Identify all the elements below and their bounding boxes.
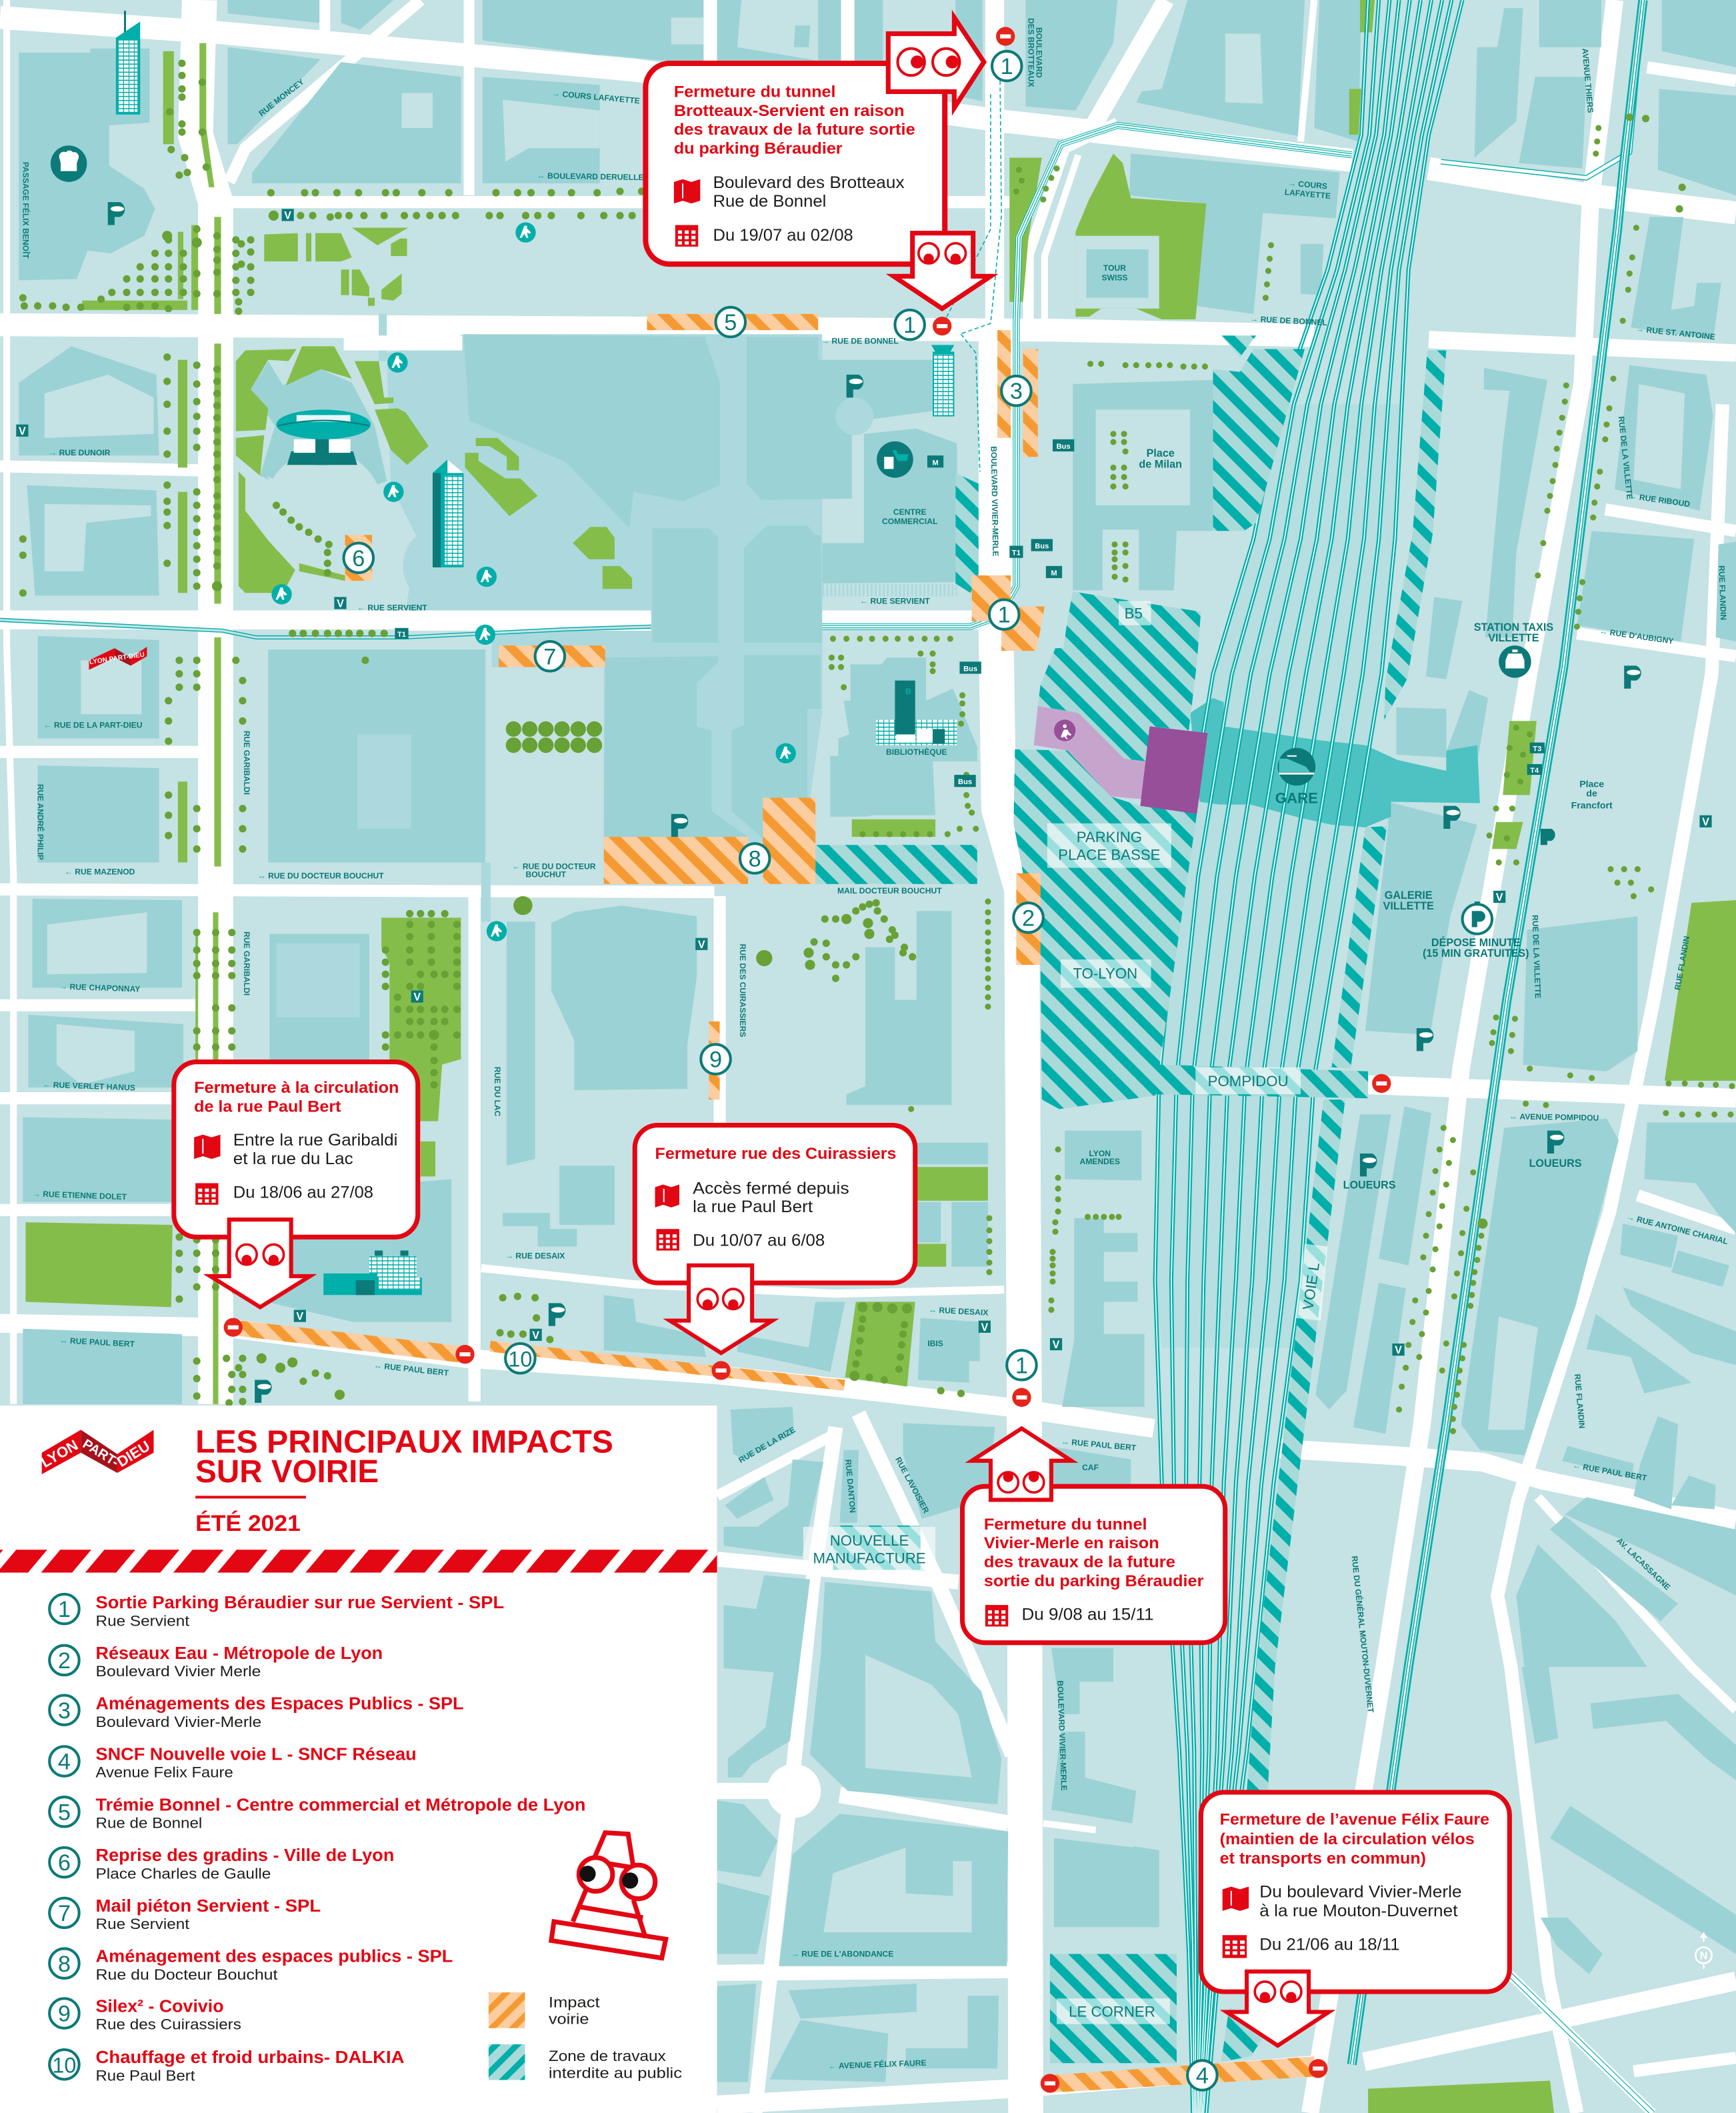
street labels: Francfort — [1571, 800, 1613, 811]
street labels: → RUE DE BONNEL — [1250, 314, 1328, 327]
address: Boulevard des Brotteaux — [713, 173, 905, 192]
north arrow — [1695, 1932, 1712, 1969]
address: Accès fermé depuis — [693, 1180, 849, 1198]
street labels: STATION TAXIS — [1474, 621, 1553, 633]
street labels: RUE FLANDIN — [1673, 935, 1691, 991]
street labels: → RUE ANTOINE CHARIAL — [1626, 1212, 1729, 1246]
callout heading: Fermeture rue des Cuirassiers — [655, 1145, 896, 1163]
street labels: ← AVENUE FÉLIX FAURE — [828, 2058, 927, 2071]
street labels: → RUE CHAPONNAY — [59, 981, 141, 994]
address: la rue Paul Bert — [693, 1198, 813, 1216]
no-entry signs — [224, 27, 1391, 2093]
calendar icon — [657, 1229, 679, 1251]
map icon — [1223, 1886, 1249, 1911]
transit labels: Bus — [958, 778, 972, 786]
legend: road impact: voirie — [549, 2011, 589, 2028]
icons: pedestrian access — [271, 222, 796, 941]
legend: road impact: Impact — [549, 1994, 601, 2010]
street labels: → COURS LAFAYETTE — [552, 89, 640, 105]
icons: vélo stations: V — [284, 209, 291, 221]
street labels: ↔ RUE DESAIX — [929, 1305, 989, 1318]
list of works: Boulevard Vivier-Merle — [96, 1714, 261, 1730]
callout: rue des Cuirassiers — [635, 1126, 915, 1353]
callout heading: Brotteaux-Servient en raison — [674, 102, 905, 120]
title: LES PRINCIPAUX IMPACTS — [195, 1424, 613, 1460]
callout heading: des travaux de la future sortie — [674, 121, 915, 139]
arrow down with eyes — [210, 1220, 310, 1307]
tower: Part-Dieu — [433, 459, 463, 567]
list of works: Rue de Bonnel — [96, 1815, 202, 1832]
street labels: GARE — [1275, 790, 1318, 807]
striped band — [0, 1550, 717, 1573]
street labels: → RUE DE BONNEL — [821, 336, 899, 345]
list of works: Reprise des gradins - Ville de Lyon — [96, 1845, 394, 1865]
list of works: 3 — [58, 1698, 71, 1724]
callout heading — [1220, 1810, 1489, 1868]
icon: dépose minute — [1463, 901, 1492, 934]
list of works: 8 — [58, 1952, 71, 1977]
zone labels: B5 — [1125, 605, 1143, 622]
icons: vélo stations: V — [981, 1322, 988, 1334]
building: bibliothèque: B — [905, 687, 911, 696]
street labels: LOUEURS — [1529, 1158, 1582, 1170]
street labels: ← RUE DU DOCTEUR — [512, 862, 596, 871]
transit labels: M — [1051, 569, 1057, 577]
arrow up with eyes — [972, 1428, 1071, 1500]
street labels: SWISS — [1101, 273, 1127, 282]
street labels: RUE MONCEY — [257, 77, 306, 118]
callout heading: Fermeture du tunnel — [984, 1516, 1147, 1534]
transit labels: T1 — [1012, 549, 1021, 557]
icons: vélo stations: V — [19, 425, 26, 437]
railway platforms — [1155, 404, 1402, 1348]
north arrow: N — [1700, 1950, 1707, 1962]
street labels: LAFAYETTE — [1284, 187, 1331, 201]
callout heading: des travaux de la future — [984, 1553, 1175, 1571]
street labels: RUE LAVOISIER — [893, 1456, 931, 1515]
number markers on map — [344, 51, 1217, 2090]
callout heading: du parking Béraudier — [674, 139, 843, 157]
icons: vélo stations: V — [337, 597, 344, 609]
building: Manufacture des Tabacs pavilion — [323, 1251, 422, 1295]
street labels: ↔ RUE PAUL BERT — [373, 1361, 449, 1378]
street labels: ← RUE VERLET HANUS — [43, 1080, 135, 1092]
address: Entre la rue Garibaldi — [233, 1131, 397, 1150]
trees — [23, 63, 1732, 1431]
icons: vélo stations — [16, 209, 1712, 1356]
street labels: ← RUE SERVIENT — [860, 596, 930, 605]
street labels: ↔ RUE DU DOCTEUR BOUCHUT — [258, 871, 384, 881]
icons: vélo stations: V — [413, 991, 421, 1003]
address — [1259, 1883, 1462, 1920]
zone labels: MANUFACTURE — [813, 1550, 926, 1566]
street labels: GALERIE — [1385, 889, 1433, 901]
arrow right with eyes — [888, 17, 984, 108]
list of works: Rue Servient — [96, 1916, 190, 1932]
legend: work zone: Zone de travaux — [549, 2048, 666, 2064]
logo Lyon Part-Dieu: PART- — [80, 1437, 121, 1470]
list of works: Silex² - Covivio — [96, 1996, 224, 2016]
mini logo Lyon Part-Dieu on map: LYON PART-DIEU — [89, 651, 145, 666]
callout heading: Fermeture à la circulation — [194, 1079, 399, 1097]
street labels: RUE DE LA RIZE — [737, 1425, 797, 1465]
street labels: PASSAGE FÉLIX BENOÎT — [21, 162, 31, 259]
number markers on map: 6 — [352, 546, 365, 571]
street labels: ← RUE PAUL BERT — [1572, 1460, 1648, 1483]
list of works: Chauffage et froid urbains- DALKIA — [96, 2047, 405, 2067]
title: SUR VOIRIE — [195, 1454, 379, 1490]
street labels: ↔ BOULEVARD DERUELLE — [537, 171, 644, 182]
street labels: AVENUE THIERS — [1580, 48, 1595, 113]
orange hatched zones: road impact — [235, 314, 1314, 2093]
list of works: Aménagements des Espaces Publics - SPL — [96, 1694, 463, 1714]
tower: Crayon — [116, 11, 140, 115]
list of works: Mail piéton Servient - SPL — [96, 1896, 321, 1916]
tower: Oxygène — [931, 345, 954, 417]
railway track centre lines — [1155, 0, 1463, 2113]
icon: taxi — [1499, 645, 1531, 678]
street labels: ↔ RUE PAUL BERT — [59, 1336, 135, 1349]
street labels: DÉPOSE MINUTE — [1431, 936, 1521, 949]
street labels: LOUEURS — [1343, 1180, 1396, 1192]
list of works: Trémie Bonnel - Centre commercial et Métropole de Lyon — [96, 1794, 585, 1814]
street labels: Place — [1147, 447, 1175, 459]
street labels: → RUE ETIENNE DOLET — [33, 1189, 127, 1202]
address: Du boulevard Vivier-Merle — [1259, 1883, 1462, 1902]
calendar icon — [195, 1183, 219, 1205]
street labels: → COURS — [1287, 178, 1328, 191]
list of works: Place Charles de Gaulle — [96, 1865, 271, 1882]
street labels: BIBLIOTHÈQUE — [886, 747, 947, 757]
number markers on map: 7 — [543, 644, 556, 669]
street labels: de — [1586, 787, 1597, 798]
garage ticks — [573, 590, 957, 605]
list of works: 1 — [58, 1597, 71, 1622]
number markers on map: 9 — [709, 1047, 722, 1073]
street labels: RUE DES CUIRASSIERS — [738, 943, 747, 1037]
street labels: LYON — [1089, 1149, 1111, 1158]
road segments over the mall — [344, 335, 651, 631]
street labels: RUE ANDRÉ PHILIP — [36, 784, 46, 860]
roundabout — [767, 1764, 821, 1818]
street labels: → RUE ST. ANTOINE — [1635, 324, 1715, 341]
transit labels: Bus — [1035, 543, 1049, 551]
street labels: RUE DANTON — [843, 1459, 857, 1514]
dates: Du 9/08 au 15/11 — [1021, 1605, 1154, 1624]
callout heading: de la rue Paul Bert — [194, 1098, 341, 1116]
street labels: AV. LACASSAGNE — [1615, 1536, 1672, 1592]
street labels: ← RUE SERVIENT — [357, 603, 427, 613]
street labels: VILLETTE — [1383, 900, 1434, 912]
transit labels: M — [932, 459, 939, 467]
street labels: Place — [1579, 778, 1604, 789]
icons: parking — [108, 202, 1641, 1403]
street labels: CAF — [1082, 1463, 1099, 1472]
list of works: 4 — [58, 1750, 71, 1775]
mini logo Lyon Part-Dieu on map — [89, 647, 147, 669]
street labels: RUE DU GÉNÉRAL MOUTON-DUVERNET — [1350, 1556, 1376, 1714]
transit labels: Bus — [963, 665, 977, 673]
street labels: BOULEVARD VIVIER-MERLE — [1055, 1680, 1069, 1791]
address: à la rue Mouton-Duvernet — [1259, 1902, 1458, 1920]
street labels: RUE DU LAC — [493, 1067, 502, 1117]
parking cars — [111, 206, 1640, 1390]
list of works: Rue Paul Bert — [96, 2067, 195, 2084]
list of works: 9 — [58, 2002, 71, 2027]
number markers on map: 8 — [749, 847, 761, 872]
number markers on map: 10 — [508, 1347, 532, 1371]
icons: vélo stations: V — [532, 1330, 539, 1342]
street labels: RUE FLANDIN — [1717, 565, 1728, 620]
list of works: Rue Servient — [96, 1612, 190, 1629]
zone labels: PLACE BASSE — [1058, 846, 1160, 863]
station purple building — [1034, 706, 1207, 814]
list of works: Aménagement des espaces publics - SPL — [96, 1946, 453, 1966]
street labels: ↔ RUE RIBOUD — [1629, 491, 1691, 509]
callout: rue Paul Bert — [174, 1062, 418, 1307]
calendar icon — [1223, 1935, 1247, 1958]
street labels: DES BROTTEAUX — [1027, 18, 1036, 87]
building: auditorium — [276, 409, 371, 465]
plaza inner tone — [276, 397, 873, 1017]
panel: legend — [0, 1406, 717, 2113]
small building in courtyard — [794, 25, 810, 47]
dates: Du 21/06 au 18/11 — [1259, 1935, 1400, 1954]
zone labels: PARKING — [1077, 829, 1142, 845]
subtitle: ÉTÉ 2021 — [195, 1510, 301, 1536]
street labels: BOULEVARD — [1035, 27, 1044, 78]
callout heading: (maintien de la circulation vélos — [1220, 1830, 1475, 1848]
hatched zones: work zones closed to public — [815, 335, 1446, 2063]
list of works: SNCF Nouvelle voie L - SNCF Réseau — [96, 1744, 417, 1764]
callout heading: Fermeture de l’avenue Félix Faure — [1220, 1810, 1489, 1828]
legend: work zone: interdite au public — [549, 2064, 682, 2081]
transit labels — [395, 439, 1545, 787]
logo Lyon Part-Dieu: DIEU — [114, 1438, 153, 1470]
transit labels: T4 — [1530, 767, 1539, 775]
street labels: ↔ RUE PAUL BERT — [1061, 1437, 1137, 1453]
callout heading: sortie du parking Béraudier — [984, 1572, 1204, 1590]
legend: road impact — [489, 1992, 601, 2028]
street labels: ← RUE MAZENOD — [65, 867, 135, 877]
callout heading: Vivier-Merle en raison — [984, 1534, 1159, 1552]
zone labels: TO-LYON — [1073, 965, 1137, 981]
icon: shopping — [877, 441, 913, 477]
street labels: RUE FLANDIN — [1573, 1374, 1587, 1429]
callout: avenue Félix Faure — [1201, 1792, 1509, 2046]
address: Rue de Bonnel — [713, 192, 826, 211]
zone labels: LE CORNER — [1069, 2003, 1155, 2020]
street labels: RUE GARIBALDI — [242, 931, 251, 995]
street labels: → RUE DE L'ABONDANCE — [791, 1950, 893, 1959]
icons: vélo stations: V — [1702, 816, 1709, 828]
address — [693, 1180, 849, 1216]
number markers on map: 3 — [1010, 379, 1023, 404]
callout heading: Fermeture du tunnel — [674, 83, 835, 101]
list of works: 6 — [58, 1850, 71, 1876]
street labels: RUE GARIBALDI — [242, 731, 251, 795]
street labels: VILLETTE — [1488, 632, 1539, 644]
number markers on map: 1 — [1001, 54, 1013, 79]
number markers on map: 4 — [1196, 2064, 1209, 2089]
list of works: Réseaux Eau - Métropole de Lyon — [96, 1643, 383, 1663]
title — [195, 1424, 613, 1490]
street labels: BOULEVARD VIVIER-MERLE — [989, 446, 1000, 556]
list of works: Avenue Felix Faure — [96, 1764, 233, 1781]
street labels: RUE DE LA VILLETTE — [1531, 915, 1543, 999]
street labels: → RUE DUNOIR — [49, 448, 111, 457]
logo Lyon Part-Dieu — [38, 1430, 153, 1474]
list of works: 7 — [58, 1901, 71, 1926]
transit labels: Bus — [1057, 443, 1071, 451]
dates: Du 18/06 au 27/08 — [233, 1184, 373, 1202]
logo Lyon Part-Dieu: LYON — [38, 1437, 81, 1471]
list of works: 5 — [58, 1800, 71, 1825]
transit labels: T3 — [1533, 745, 1541, 753]
icons: vélo stations: V — [1395, 1344, 1402, 1356]
map icon — [655, 1184, 679, 1208]
transit labels: T1 — [397, 631, 406, 639]
number markers on map: 1 — [998, 603, 1011, 628]
street labels: TOUR — [1103, 263, 1126, 273]
icon: cone with eyes — [551, 1833, 666, 1958]
list of works: Sortie Parking Béraudier sur rue Servient - SPL — [96, 1592, 504, 1612]
address — [233, 1131, 397, 1168]
callout heading — [674, 83, 915, 157]
arrow down with eyes — [670, 1266, 772, 1353]
street labels: IBIS — [927, 1339, 943, 1348]
street labels: RUE DE LA VILLETTE — [1617, 416, 1635, 500]
station hall band — [1190, 698, 1480, 827]
list of works — [49, 1592, 585, 2084]
street labels: BOUCHUT — [526, 870, 567, 879]
zone labels: NOUVELLE — [830, 1532, 909, 1549]
street labels: (15 MIN GRATUITES) — [1423, 947, 1529, 959]
street labels: → RUE DESAIX — [505, 1252, 565, 1261]
street labels: ↔ AVENUE POMPIDOU — [1509, 1112, 1599, 1123]
zone labels: POMPIDOU — [1208, 1073, 1289, 1090]
railway tracks — [1155, 0, 1463, 2113]
dates: Du 10/07 au 6/08 — [693, 1231, 825, 1250]
number markers on map: 1 — [903, 313, 916, 338]
zone labels: VOIE L — [1299, 1262, 1323, 1311]
icon: train station — [1278, 748, 1315, 785]
number markers on map: 1 — [1015, 1353, 1028, 1378]
list of works: 10 — [52, 2053, 76, 2077]
list of works: Boulevard Vivier Merle — [96, 1663, 261, 1680]
tour swiss plaza — [1075, 236, 1159, 309]
number markers on map: 2 — [1022, 905, 1035, 931]
callout heading — [984, 1516, 1204, 1590]
callout: tunnel Brotteaux-Servient — [645, 17, 991, 309]
zone labels — [803, 601, 1327, 2024]
legend: work zone — [489, 2044, 682, 2081]
address: et la rue du Lac — [233, 1150, 353, 1168]
number markers on map: 5 — [724, 310, 737, 335]
icon: chef hat — [51, 145, 87, 182]
list of works: Rue des Cuirassiers — [96, 2016, 241, 2033]
arrow down with eyes — [1227, 1972, 1329, 2046]
icons: vélo stations: V — [296, 1311, 303, 1323]
icons: vélo stations: V — [1053, 1339, 1060, 1351]
callout heading: et transports en commun) — [1220, 1850, 1426, 1868]
street labels: de Milan — [1139, 458, 1182, 470]
street labels: AMENDES — [1079, 1157, 1120, 1166]
arrow down with eyes — [893, 233, 991, 309]
list of works: Rue du Docteur Bouchut — [96, 1966, 278, 1983]
callout heading — [194, 1079, 399, 1116]
icons: vélo stations: V — [1496, 891, 1503, 903]
map icon — [194, 1135, 221, 1159]
street labels: ← RUE DE LA PART-DIEU — [43, 720, 143, 729]
pedestrian mall — [379, 314, 822, 921]
street labels: MAIL DOCTEUR BOUCHUT — [837, 886, 942, 895]
callout: tunnel Vivier-Merle — [963, 1428, 1225, 1643]
street labels: ↔ RUE D'AUBIGNY — [1599, 626, 1674, 646]
address — [713, 173, 905, 211]
building: bibliothèque — [876, 681, 957, 745]
street labels: COMMERCIAL — [882, 517, 938, 526]
icons: vélo stations: V — [698, 939, 705, 951]
dates: Du 19/07 au 02/08 — [713, 226, 853, 245]
street labels: CENTRE — [893, 507, 927, 517]
list of works: 2 — [58, 1648, 71, 1674]
calendar icon — [985, 1605, 1008, 1626]
calendar icon — [675, 225, 698, 247]
map icon — [674, 179, 700, 203]
